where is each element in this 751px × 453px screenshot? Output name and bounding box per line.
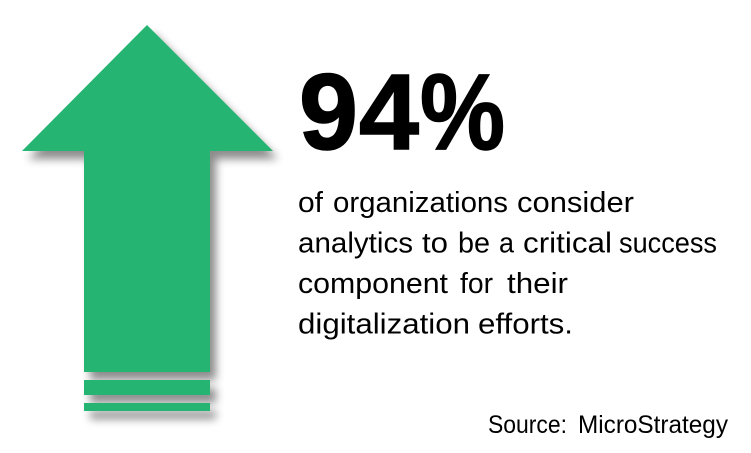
headline statistic: 4 bbox=[359, 51, 419, 172]
source note bbox=[488, 411, 728, 439]
body text: their bbox=[507, 268, 568, 300]
body text: for bbox=[460, 268, 493, 300]
headline statistic: % bbox=[420, 51, 505, 172]
body text: be bbox=[458, 228, 490, 260]
body text: component bbox=[298, 268, 448, 300]
body text: digitalization bbox=[298, 308, 470, 340]
source note: Source: bbox=[488, 411, 567, 439]
body text: organizations bbox=[333, 187, 508, 219]
body text: of bbox=[298, 187, 324, 219]
body text: success bbox=[619, 228, 717, 260]
body text: efforts. bbox=[478, 308, 573, 340]
body text: a bbox=[499, 228, 515, 260]
icon: upward arrow with stripes bbox=[22, 25, 278, 419]
headline statistic: 9 bbox=[299, 51, 358, 172]
body text: analytics bbox=[298, 228, 413, 260]
body text: consider bbox=[517, 187, 634, 219]
body text bbox=[298, 187, 717, 340]
source note: MicroStrategy bbox=[578, 411, 728, 439]
body text: critical bbox=[523, 228, 612, 260]
headline statistic bbox=[299, 51, 505, 172]
body text: to bbox=[422, 228, 448, 260]
